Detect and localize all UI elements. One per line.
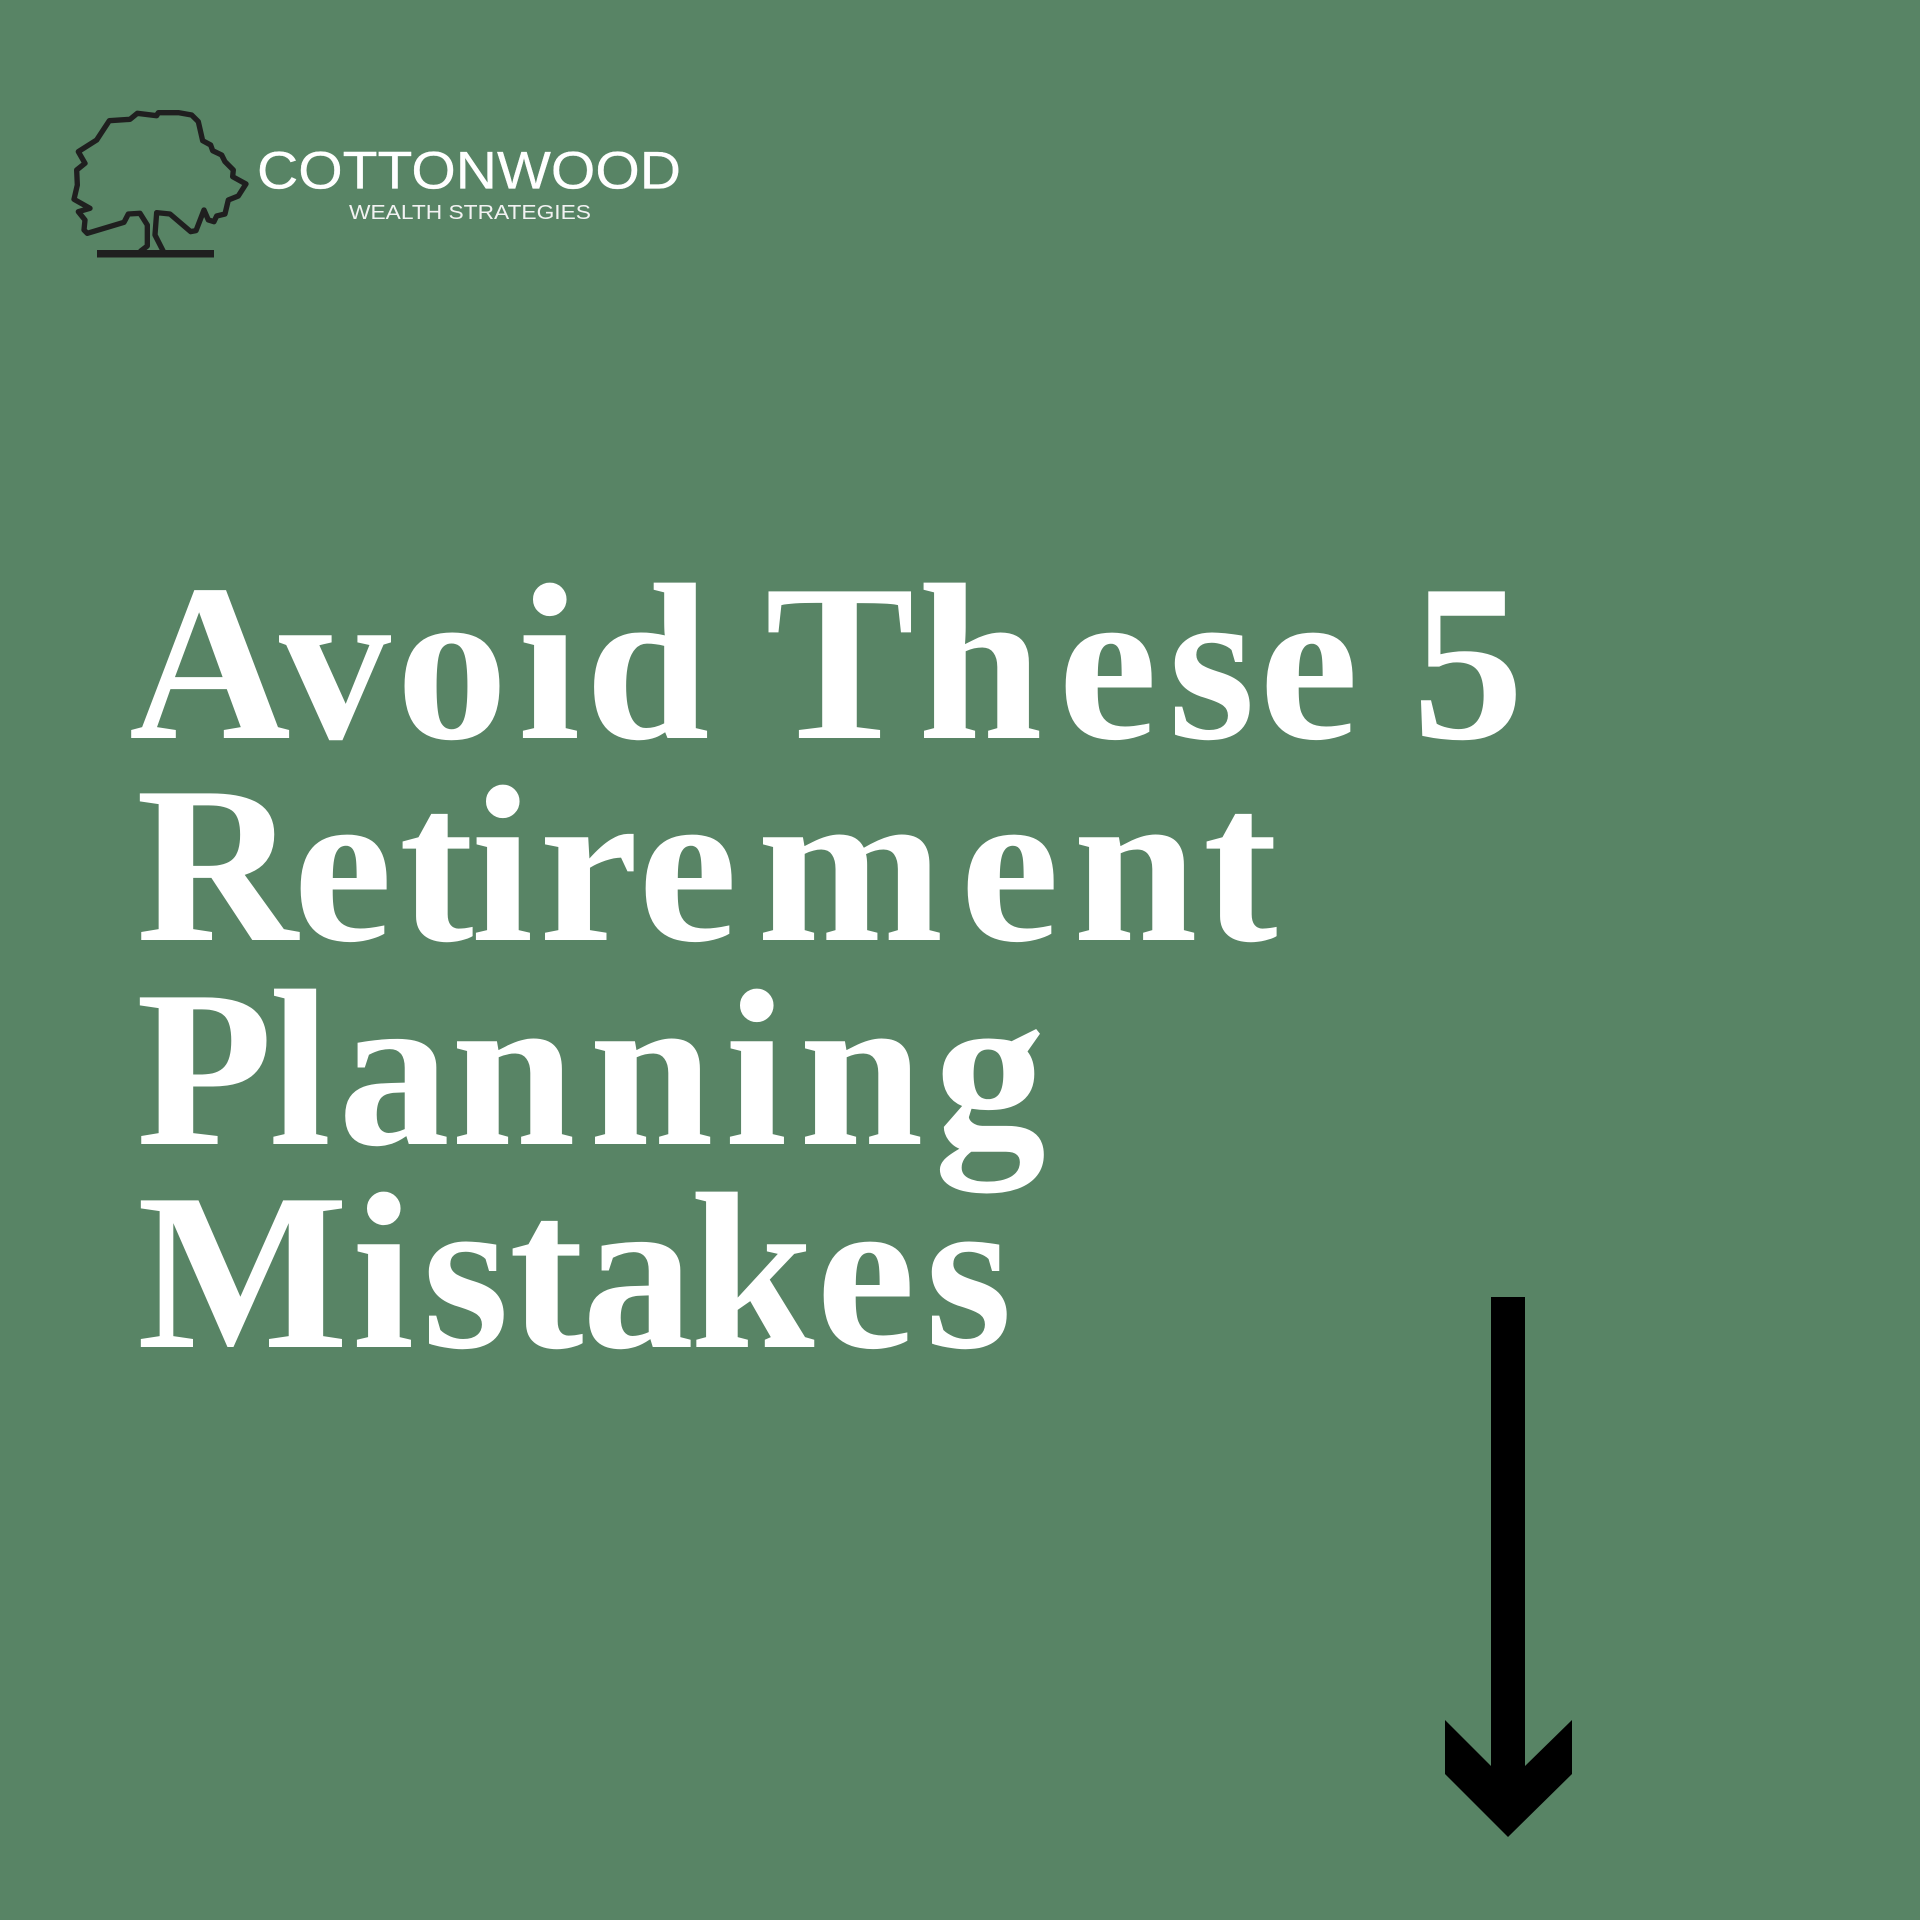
title: Planning xyxy=(136,945,1046,1194)
icon: tree xyxy=(74,113,246,258)
title xyxy=(129,539,1524,1396)
logo: Cottonwood Wealth Strategies xyxy=(74,113,681,258)
logo tagline: WEALTH STRATEGIES xyxy=(349,202,591,224)
title: Avoid These 5 xyxy=(129,539,1524,787)
arrow: pointing down xyxy=(1445,1297,1572,1837)
title: Mistakes xyxy=(137,1148,1012,1396)
logo wordmark: COTTONWOOD xyxy=(257,142,681,200)
title: Retirement xyxy=(136,741,1278,989)
